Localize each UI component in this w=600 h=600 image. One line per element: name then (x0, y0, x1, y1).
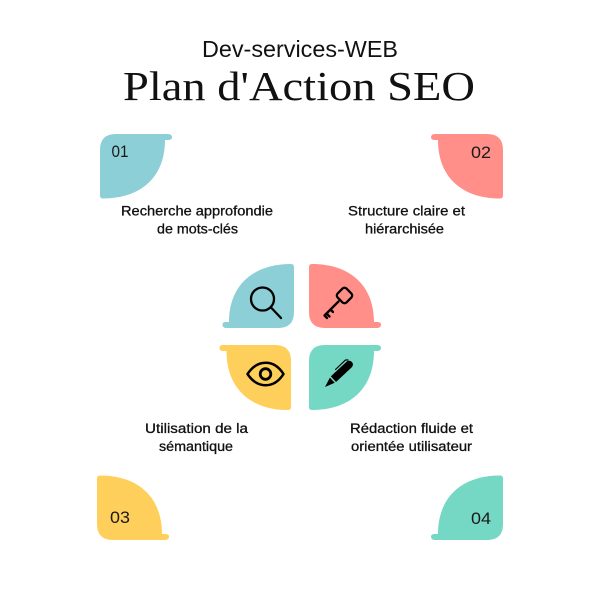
label 03: Utilisation de la (145, 421, 249, 436)
panel: central yellow quadrant with eye (220, 345, 291, 410)
label 01 (121, 204, 273, 236)
quadrant: red (309, 264, 381, 328)
label 01: de mots-clés (157, 222, 238, 236)
panel: step 02 (348, 134, 503, 236)
panel: step 01 (100, 134, 273, 236)
icon: eye (248, 363, 284, 385)
label 03: sémantique (159, 439, 233, 454)
panel: step 03 (97, 421, 249, 540)
number 03: 03 (110, 509, 130, 527)
quadrant: blue (222, 264, 294, 328)
label 03 (145, 421, 249, 454)
panel: central red quadrant with key (309, 264, 381, 328)
shape: step 02 (431, 134, 503, 198)
panel: central blue quadrant with magnifier (222, 264, 294, 328)
number 04: 04 (471, 510, 491, 528)
icon: pen (325, 360, 353, 387)
label 04: Rédaction fluide et (350, 421, 473, 436)
panel: central teal quadrant with pen (309, 345, 381, 410)
shape: step 04 (431, 476, 503, 540)
panel: step 04 (350, 421, 503, 540)
number 02: 02 (471, 144, 491, 162)
number 01: 01 (112, 143, 128, 161)
label 04: orientée utilisateur (351, 439, 473, 454)
shape: step 03 (97, 476, 169, 540)
subtitle: Dev-services-WEB (202, 36, 398, 62)
label 01: Recherche approfondie (121, 204, 273, 218)
label 02: Structure claire et (348, 204, 465, 218)
quadrant: teal (309, 345, 381, 410)
title: Plan d'Action SEO (123, 63, 475, 109)
label 02: hiérarchisée (365, 222, 444, 236)
label 02 (348, 204, 465, 236)
label 04 (350, 421, 473, 454)
icon: key (324, 287, 353, 318)
quadrant: yellow (220, 345, 291, 410)
icon: magnifier (251, 288, 281, 318)
shape: step 01 (100, 134, 172, 198)
